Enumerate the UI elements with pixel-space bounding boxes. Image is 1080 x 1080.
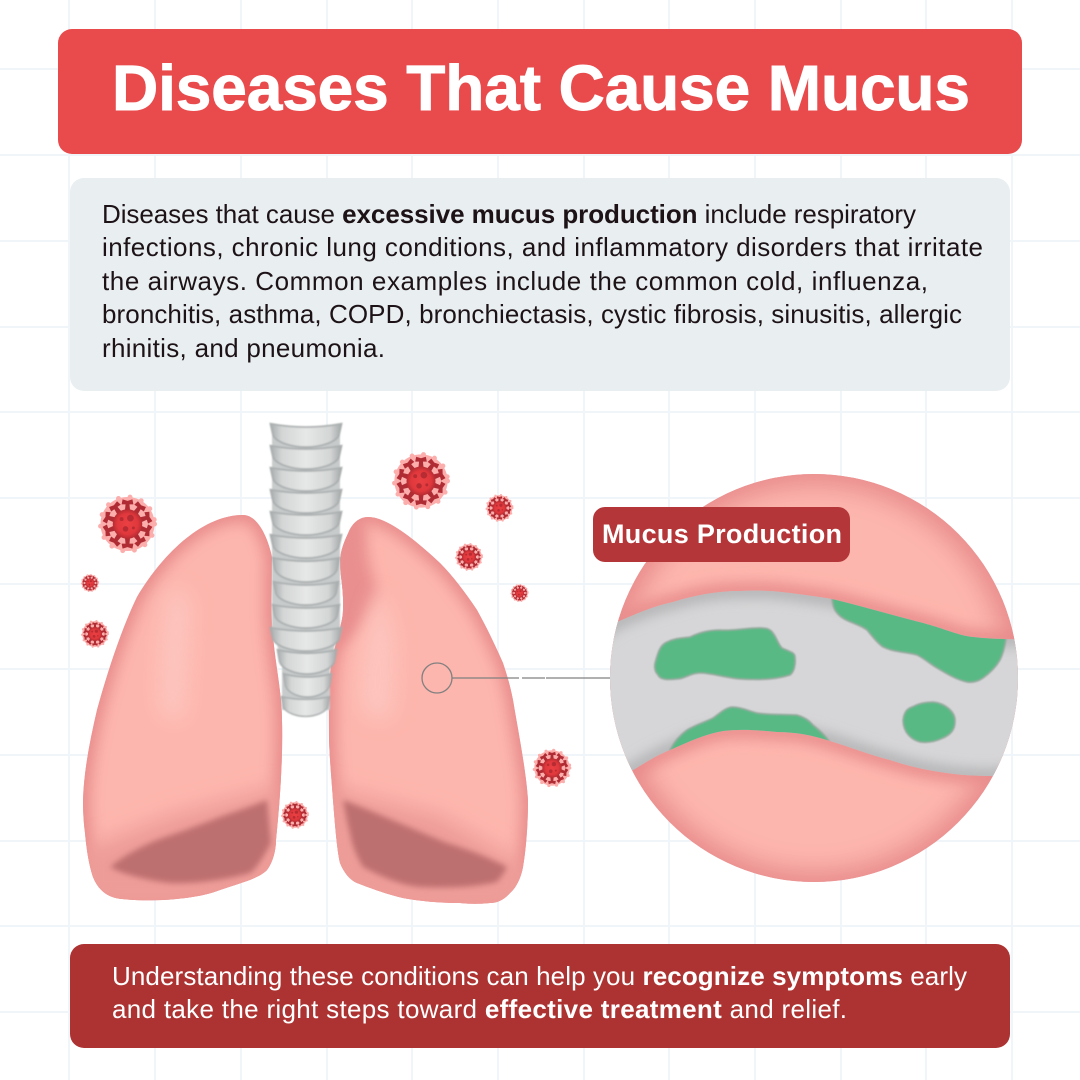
title banner [58,29,1022,154]
intro text: infections, chronic lung conditions, and inflammatory disorders that irritate [102,232,983,262]
callout connector [422,663,611,693]
panel: introduction [70,178,1010,391]
illustration: virus particles [82,454,570,828]
label: Mucus Production: Mucus Production [602,519,842,549]
illustration: right lung [325,515,535,910]
title: Diseases That Cause Mucus [112,52,970,124]
intro text: rhinitis, and pneumonia. [102,333,385,363]
closing text: and take the right steps toward effective treatment and relief. [112,994,847,1024]
illustration: trachea [270,424,342,716]
intro text: bronchitis, asthma, COPD, bronchiectasis, cystic fibrosis, sinusitis, allergic [102,299,962,329]
intro text: the airways. Common examples include the common cold, influenza, [102,266,928,296]
illustration: left lung [80,515,282,905]
panel: closing note [70,944,1010,1048]
intro text [102,199,983,363]
closing text [112,961,967,1024]
magnified airway [590,474,1040,882]
label: Mucus Production [593,507,850,562]
mucus deposits [653,599,1008,750]
intro text: Diseases that cause excessive mucus production include respiratory [102,199,916,229]
closing text: Understanding these conditions can help you recognize symptoms early [112,961,967,991]
